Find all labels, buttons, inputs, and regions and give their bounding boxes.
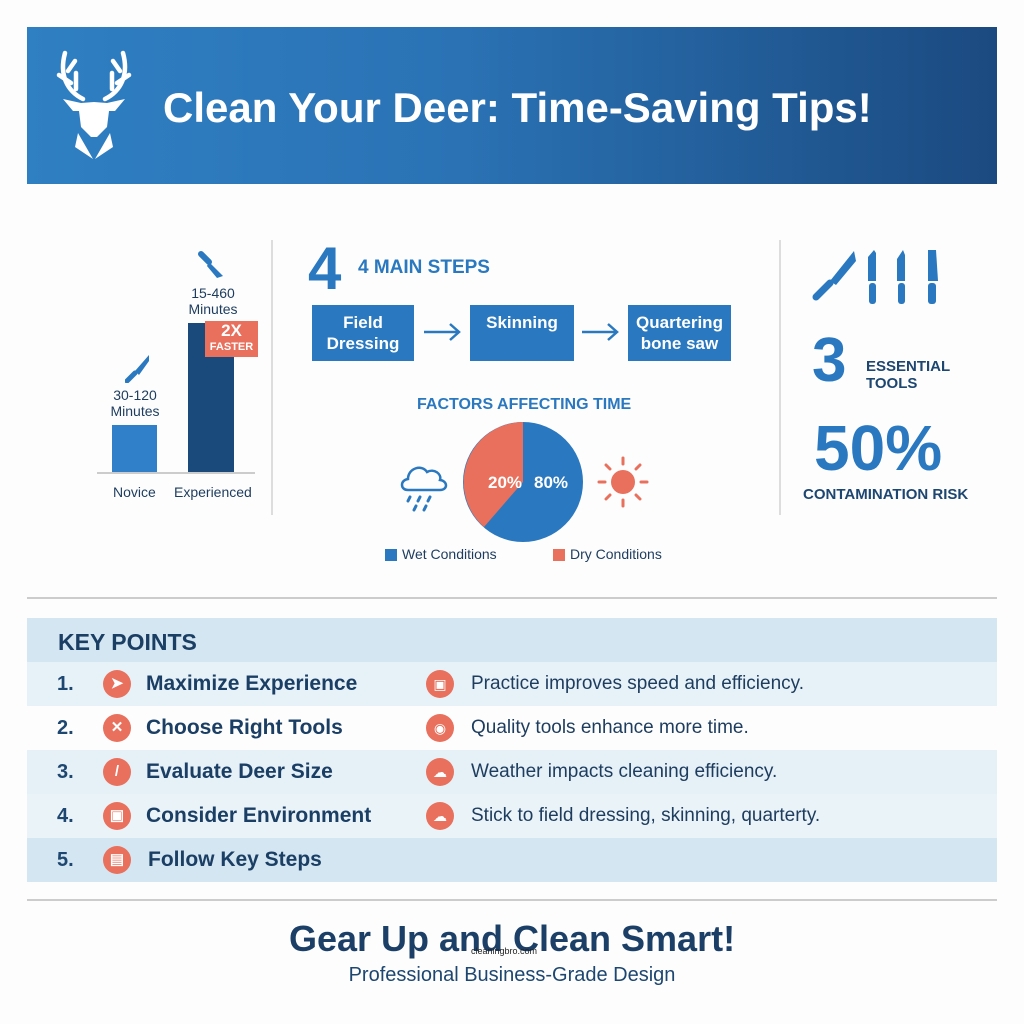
row 4: Consider Environment bbox=[146, 804, 371, 827]
row 4: ▣ bbox=[110, 807, 124, 824]
icon: knives bbox=[812, 250, 938, 304]
bar experienced bbox=[188, 323, 234, 472]
icon: sun bbox=[598, 456, 648, 508]
row 5: Follow Key Steps bbox=[148, 848, 322, 871]
row 2: ◉ bbox=[434, 720, 446, 736]
panel: time chart: Experienced bbox=[174, 484, 252, 500]
panel: tools stats: TOOLS bbox=[866, 375, 917, 392]
badge 2X faster bbox=[205, 321, 258, 357]
icon: cleaver bbox=[198, 251, 223, 278]
footer subtitle: Professional Business-Grade Design bbox=[349, 964, 675, 986]
heading: factors: FACTORS AFFECTING TIME bbox=[417, 396, 631, 413]
stat: 3 tools: 3 bbox=[812, 326, 846, 395]
panel: tools stats: CONTAMINATION RISK bbox=[803, 486, 968, 503]
panel: tools stats: ESSENTIAL bbox=[866, 358, 950, 375]
row 1: ➤ bbox=[111, 675, 123, 692]
label experienced bbox=[188, 285, 238, 317]
arrow bbox=[424, 323, 461, 341]
step: skinning: Skinning bbox=[486, 313, 558, 332]
row 3: ☁ bbox=[433, 764, 447, 780]
row 5: 5. bbox=[57, 849, 74, 871]
badge 2X faster: FASTER bbox=[210, 341, 253, 353]
row 3: / bbox=[115, 763, 119, 780]
row 2: Quality tools enhance more time. bbox=[471, 717, 749, 738]
step: quartering: bone saw bbox=[641, 334, 718, 353]
step: field dressing: Field bbox=[343, 313, 383, 332]
legend: Dry Conditions bbox=[570, 546, 662, 562]
step: field dressing bbox=[312, 305, 414, 361]
legend: Wet Conditions bbox=[402, 546, 497, 562]
row 2 bbox=[27, 706, 997, 750]
label novice bbox=[110, 387, 160, 419]
row 1: 1. bbox=[57, 673, 74, 695]
heading bbox=[27, 618, 997, 662]
row 2: 2. bbox=[57, 717, 74, 739]
panel: tools stats bbox=[803, 250, 968, 503]
row 4: Stick to field dressing, skinning, quarterty. bbox=[471, 805, 820, 826]
step: quartering bbox=[628, 305, 731, 361]
row 3: Weather impacts cleaning efficiency. bbox=[471, 761, 777, 782]
row 4: ☁ bbox=[433, 808, 447, 824]
heading: KEY POINTS bbox=[58, 629, 197, 655]
arrow bbox=[582, 323, 619, 341]
pie chart bbox=[463, 422, 583, 542]
row 5 bbox=[27, 838, 997, 882]
bar novice bbox=[112, 425, 157, 472]
step: skinning bbox=[470, 305, 574, 361]
step: field dressing: Dressing bbox=[327, 334, 399, 353]
badge 2X faster: 2X bbox=[221, 321, 242, 340]
row 3 bbox=[27, 750, 997, 794]
step: quartering: Quartering bbox=[636, 313, 723, 332]
row 2: Choose Right Tools bbox=[146, 716, 343, 739]
header banner bbox=[27, 27, 997, 184]
label experienced: Minutes bbox=[188, 301, 238, 317]
row 1: Practice improves speed and efficiency. bbox=[471, 673, 804, 694]
axis labels: Novice bbox=[113, 484, 156, 500]
icon: rain cloud bbox=[400, 466, 448, 512]
icon: knife bbox=[125, 355, 149, 383]
label novice: 30-120 bbox=[113, 387, 157, 403]
row 4: 4. bbox=[57, 805, 74, 827]
heading: 4 main steps bbox=[308, 235, 490, 302]
row 1: Maximize Experience bbox=[146, 672, 357, 695]
label novice: Minutes bbox=[110, 403, 160, 419]
row 4 bbox=[27, 794, 997, 838]
label experienced: 15-460 bbox=[191, 285, 235, 301]
row 3: 3. bbox=[57, 761, 74, 783]
panel: time chart bbox=[97, 251, 258, 500]
legend bbox=[385, 546, 662, 562]
row 2: ✕ bbox=[111, 719, 123, 736]
icon: deer head bbox=[56, 50, 132, 159]
process flow bbox=[312, 305, 731, 361]
pie chart: 80% bbox=[534, 473, 568, 492]
row 1: ▣ bbox=[433, 676, 447, 692]
panel: key points bbox=[27, 618, 997, 882]
row 5: ▤ bbox=[110, 851, 124, 868]
watermark: cleaningbro.com bbox=[471, 946, 537, 956]
heading: 4 main steps: 4 MAIN STEPS bbox=[358, 257, 490, 278]
heading: 4 main steps: 4 bbox=[308, 235, 341, 302]
row 3: Evaluate Deer Size bbox=[146, 760, 333, 783]
footer title: Gear Up and Clean Smart! bbox=[289, 918, 735, 959]
stat: 50%: 50% bbox=[814, 412, 942, 484]
pie chart: 20% bbox=[488, 473, 522, 492]
title: Clean Your Deer: Time-Saving Tips! bbox=[163, 84, 872, 131]
row 1 bbox=[27, 662, 997, 706]
